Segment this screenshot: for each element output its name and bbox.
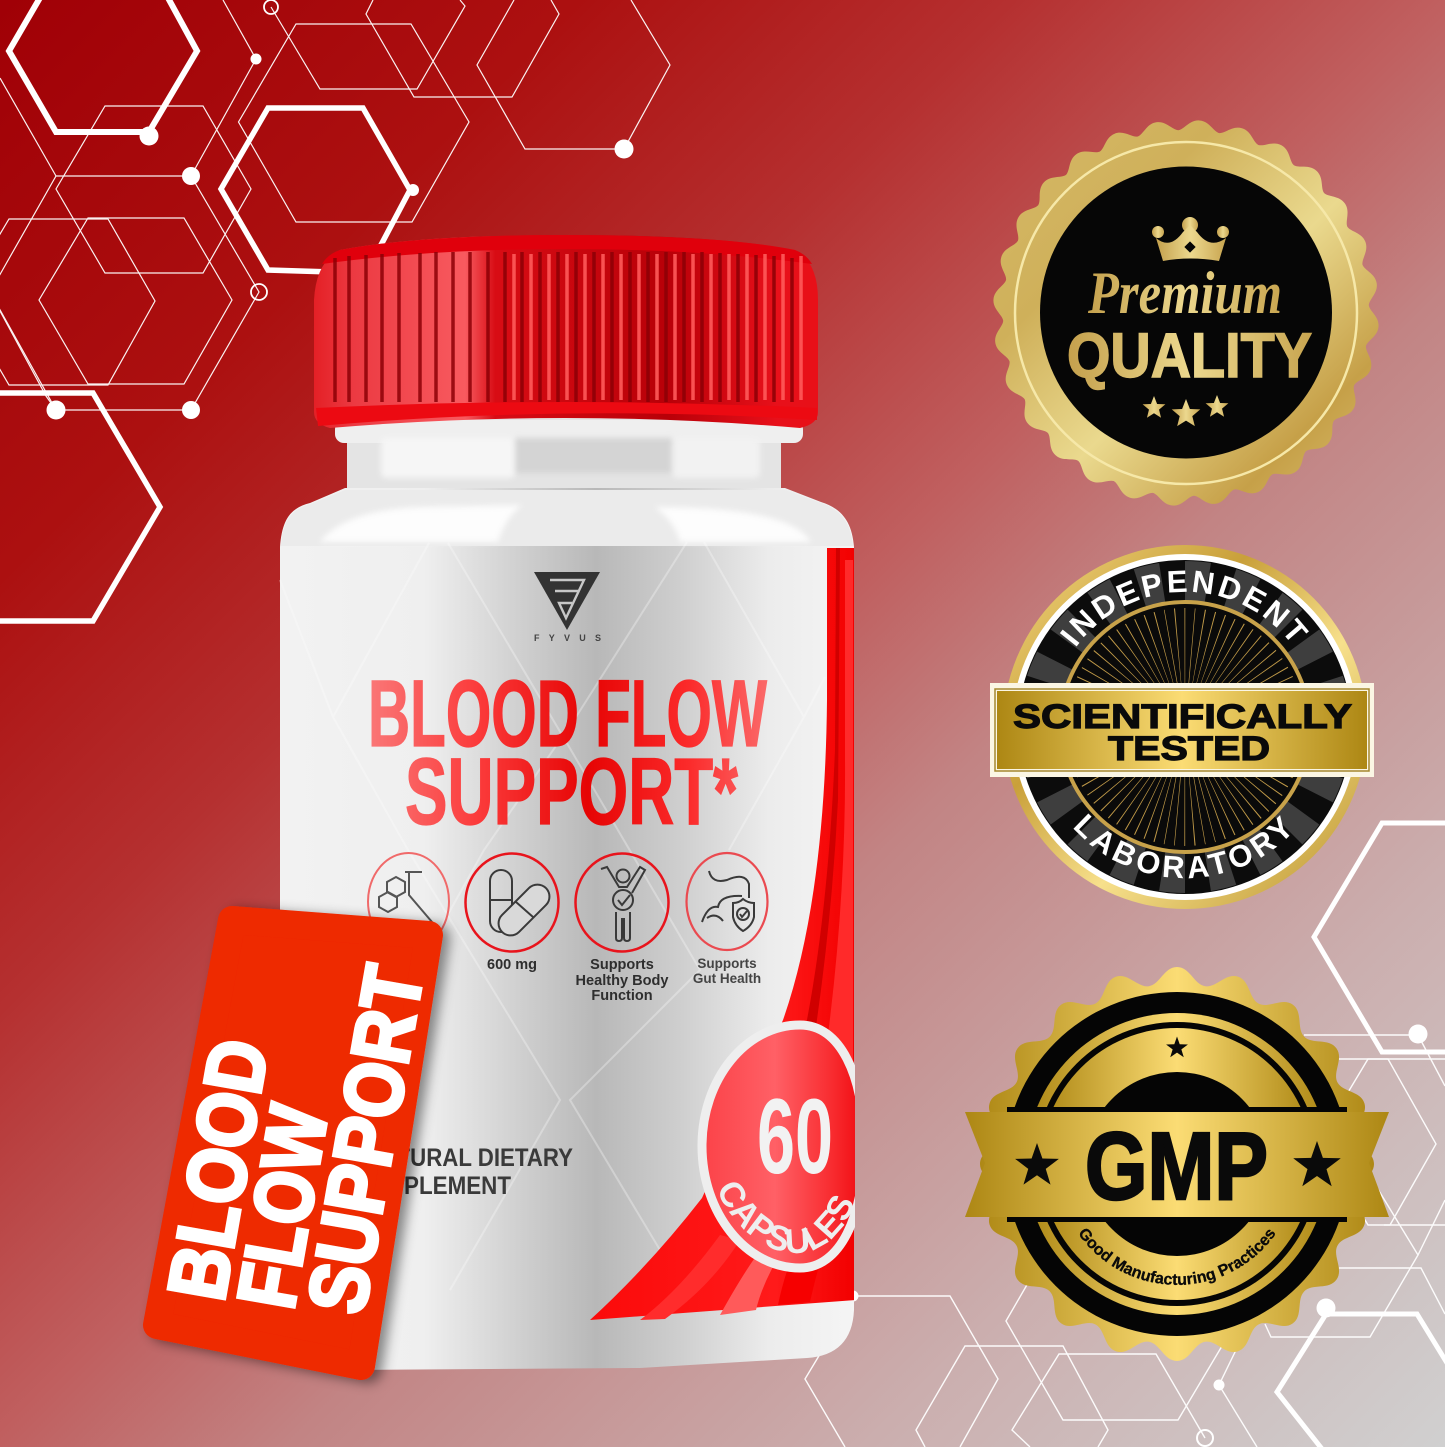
premium text: Premium	[1087, 260, 1282, 326]
icon: crown	[1152, 217, 1229, 261]
card text: BLOOD	[151, 1033, 286, 1307]
icon captions	[487, 956, 761, 1004]
badge: GMP	[965, 967, 1389, 1361]
hexagon network: top left	[0, 0, 670, 621]
bottle cap	[314, 235, 818, 428]
scientifically tested banner: SCIENTIFICALLY	[1013, 698, 1352, 736]
card text	[151, 935, 441, 1331]
badge: independent laboratory	[990, 545, 1374, 909]
icon captions: Supports	[697, 956, 757, 971]
shoulder highlights	[281, 490, 853, 546]
icon captions: Function	[591, 988, 653, 1004]
bottle neck	[335, 412, 803, 502]
three stars	[1143, 395, 1228, 426]
icon captions: 600 mg	[487, 957, 537, 973]
icon: gut health	[686, 853, 768, 950]
icon captions: Healthy Body	[576, 973, 668, 989]
card text: SUPPORT	[291, 959, 441, 1320]
good manufacturing practices arc text: Good Manufacturing Practices	[1080, 1228, 1275, 1286]
top star	[1166, 1036, 1188, 1057]
laboratory arc text: LABORATORY	[1074, 814, 1290, 878]
supplement descriptor	[358, 1144, 573, 1200]
card text: FLOW	[221, 1098, 346, 1315]
label crystal pattern	[280, 542, 825, 1300]
product title: SUPPORT*	[405, 739, 738, 845]
icon: healthy body	[576, 854, 668, 952]
icon captions: Supports	[590, 957, 654, 973]
60 capsules seal: CAPSULES	[720, 1182, 853, 1254]
independent arc text: INDEPENDENT	[1060, 570, 1309, 646]
product title: BLOOD FLOW	[368, 661, 767, 767]
bottle body	[280, 488, 854, 1370]
GMP ribbon	[965, 1112, 1389, 1220]
promotional red card	[151, 920, 441, 1366]
product title	[368, 661, 767, 845]
product bottle	[279, 235, 855, 1370]
hexagon network: bottom right	[805, 823, 1445, 1447]
supplement descriptor: SUPPLEMENT	[358, 1172, 511, 1200]
supplement descriptor: NATURAL DIETARY	[366, 1144, 573, 1172]
red label swoosh	[590, 548, 855, 1320]
icon captions: Gut Health	[693, 971, 761, 986]
60 capsules seal	[698, 1020, 855, 1272]
scientifically tested banner: TESTED	[1108, 730, 1270, 768]
GMP ribbon: GMP	[1085, 1113, 1268, 1220]
60 capsules seal: 60	[757, 1076, 833, 1196]
quality text: QUALITY	[1067, 321, 1312, 391]
badge: premium quality	[990, 117, 1382, 509]
brand logo: FYVUS	[534, 633, 601, 643]
brand logo	[534, 572, 601, 643]
scientifically tested banner	[990, 683, 1374, 777]
icon: capsules	[466, 854, 558, 952]
icon: flask and molecule	[368, 853, 449, 950]
